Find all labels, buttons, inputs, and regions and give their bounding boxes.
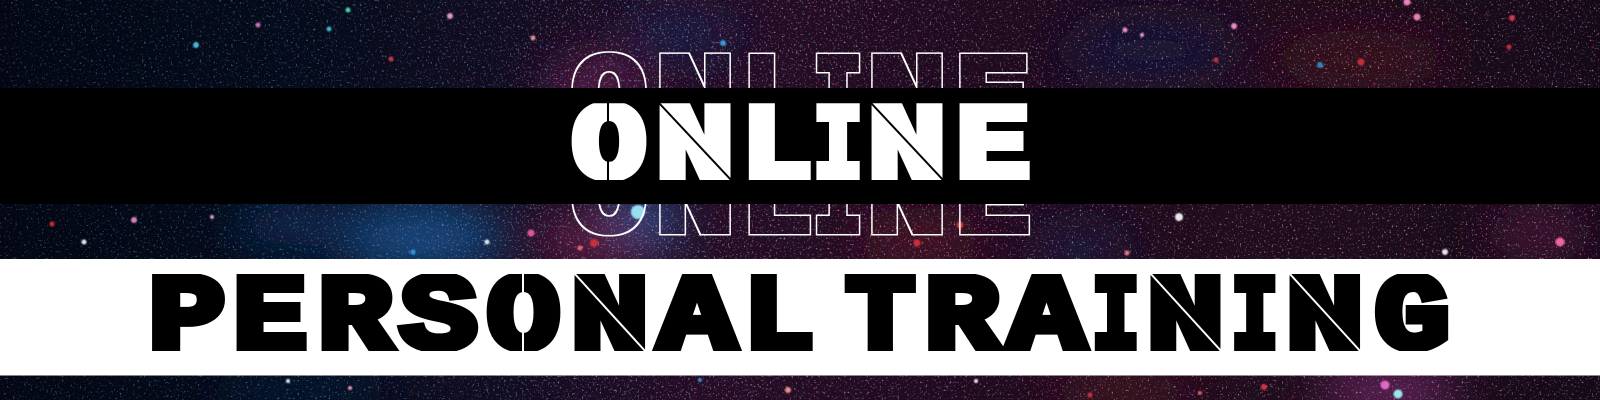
outlined echo of ONLINE below the band: I — [813, 142, 863, 264]
black band with ONLINE heading: O — [572, 88, 646, 210]
white band with PERSONAL TRAINING heading: L — [743, 259, 814, 381]
white band with PERSONAL TRAINING heading: A — [658, 259, 736, 381]
black band with ONLINE heading: N — [656, 88, 734, 210]
outlined echo of ONLINE above the band: N — [868, 39, 946, 161]
white band with PERSONAL TRAINING heading: I — [1092, 259, 1140, 381]
white band with PERSONAL TRAINING heading — [0, 259, 1600, 381]
white band with PERSONAL TRAINING heading: N — [1147, 259, 1224, 381]
outlined echo of ONLINE above the band: O — [572, 39, 646, 161]
outlined echo of ONLINE above the band: L — [741, 39, 812, 161]
white band with PERSONAL TRAINING heading: I — [1231, 259, 1278, 381]
outlined echo of ONLINE above the band: I — [813, 39, 863, 161]
outlined echo of ONLINE below the band: L — [741, 142, 812, 264]
white band with PERSONAL TRAINING heading: G — [1375, 259, 1450, 381]
outlined echo of ONLINE below the band: N — [868, 142, 946, 264]
outlined echo of ONLINE below the band: O — [572, 142, 646, 264]
white band with PERSONAL TRAINING heading: T — [846, 259, 915, 381]
white band with PERSONAL TRAINING heading: R — [924, 259, 999, 381]
white band with PERSONAL TRAINING heading: O — [487, 259, 560, 381]
black band with ONLINE heading: N — [868, 88, 946, 210]
outlined echo of ONLINE below the band — [572, 142, 1030, 264]
outlined echo of ONLINE below the band: E — [956, 142, 1030, 264]
white band with PERSONAL TRAINING heading: S — [400, 259, 478, 381]
black band with ONLINE heading: I — [813, 88, 863, 210]
outlined echo of ONLINE above the band: N — [656, 39, 734, 161]
white band with PERSONAL TRAINING heading: P — [148, 259, 226, 381]
white band with PERSONAL TRAINING heading: R — [318, 259, 392, 381]
white band with PERSONAL TRAINING heading: N — [571, 259, 649, 381]
white band with PERSONAL TRAINING heading: E — [233, 259, 307, 381]
outlined echo of ONLINE above the band — [572, 39, 1030, 161]
black band with ONLINE heading — [0, 88, 1600, 210]
white band with PERSONAL TRAINING heading: N — [1286, 259, 1364, 381]
outlined echo of ONLINE above the band: E — [956, 39, 1030, 161]
outlined echo of ONLINE below the band: N — [656, 142, 734, 264]
black band with ONLINE heading: L — [741, 88, 812, 210]
white band with PERSONAL TRAINING heading: A — [1008, 259, 1086, 381]
black band with ONLINE heading: E — [956, 88, 1030, 210]
